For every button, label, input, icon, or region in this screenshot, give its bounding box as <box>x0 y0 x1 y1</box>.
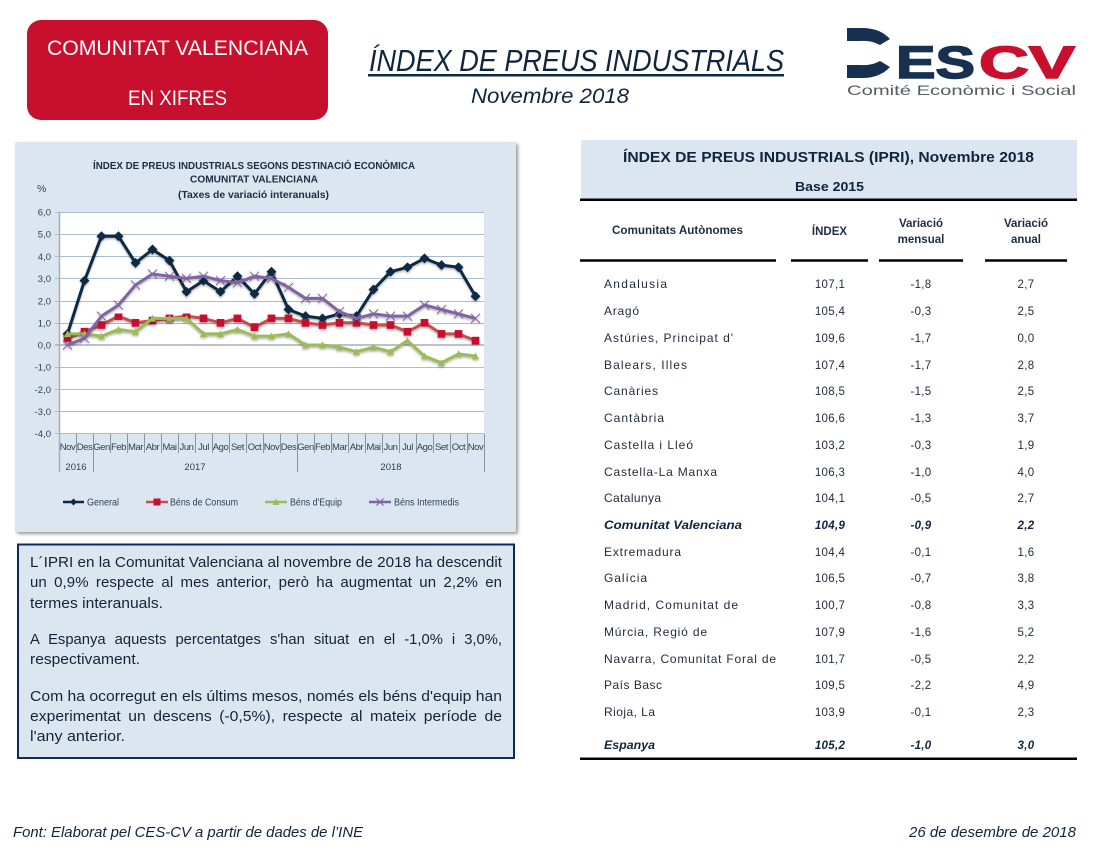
table rows: -0,9 <box>910 520 932 532</box>
text panel: commentary: un 0,9% respecte al mes anterior, però ha augmentat un 2,2% en <box>30 574 502 591</box>
table rows: 3,0 <box>1018 740 1035 752</box>
legend: Béns de Consum <box>170 498 238 508</box>
legend: Béns Intermedis <box>394 498 459 508</box>
table rows: -1,3 <box>910 413 932 425</box>
table rows: 3,7 <box>1018 413 1034 425</box>
chart title: ÍNDEX DE PREUS INDUSTRIALS SEGONS DESTINACIÓ ECONÒMICA <box>93 159 415 172</box>
table rows <box>580 277 1077 760</box>
x-axis year labels: 2016 <box>65 462 87 473</box>
x-axis month labels: Oct <box>452 442 466 453</box>
x-axis month labels: Mar <box>332 442 347 453</box>
series: Béns de Consum <box>68 316 476 341</box>
table rows: -1,0 <box>910 740 932 752</box>
table rows: -2,2 <box>910 680 932 692</box>
table rows: 107,9 <box>815 627 845 639</box>
x-axis month labels: Ago <box>213 442 228 453</box>
table heading band: Base 2015 <box>795 179 864 194</box>
logo: CES-CV <box>847 28 1076 98</box>
text panel: commentary: L´IPRI en la Comunitat Valenciana al novembre de 2018 ha descendit <box>30 554 503 571</box>
table rows: País Basc <box>604 678 662 692</box>
panel: line chart <box>15 142 516 532</box>
table rows: Andalusia <box>604 277 667 291</box>
legend: Béns d'Equip <box>290 498 342 508</box>
table rows: 2,7 <box>1018 493 1034 505</box>
table rows: Espanya <box>604 738 655 752</box>
table rows: -1,8 <box>910 279 932 291</box>
table rows: 3,8 <box>1018 573 1034 585</box>
table rows: Rioja, La <box>604 705 655 719</box>
x-axis month labels: Set <box>231 442 245 453</box>
y-axis labels: -2,0 <box>35 385 51 396</box>
x-axis month labels: Feb <box>111 442 126 453</box>
table rows: Aragó <box>604 304 639 318</box>
table rows: 106,5 <box>815 573 845 585</box>
text panel: commentary: experimentat un descens (-0,5%), respecte al mateix període de <box>30 708 502 725</box>
table rows: 106,6 <box>815 413 845 425</box>
table rows: 2,3 <box>1018 707 1034 719</box>
logo: CES-CV: ES <box>896 37 975 88</box>
table rows: -0,8 <box>910 600 932 612</box>
table rows: -0,1 <box>910 707 932 719</box>
x-axis month labels: Jul <box>198 442 209 453</box>
table rows: 2,5 <box>1018 386 1034 398</box>
y-axis labels: 5,0 <box>38 230 51 241</box>
x-axis year labels: 2017 <box>184 462 206 473</box>
table rows: -0,5 <box>910 654 932 666</box>
table rows: 104,1 <box>815 493 845 505</box>
text panel: commentary: termes interanuals. <box>30 595 163 612</box>
legend: General <box>87 498 119 508</box>
table rows: Madrid, Comunitat de <box>604 598 738 612</box>
table rows: 2,2 <box>1017 520 1035 532</box>
table column headers: Variació <box>899 218 943 230</box>
y-axis labels: 4,0 <box>38 252 51 263</box>
legend <box>63 498 459 508</box>
x-axis month labels <box>60 442 484 453</box>
table rows: 0,0 <box>1018 333 1034 345</box>
chart title <box>93 159 415 201</box>
table rows: 1,9 <box>1018 440 1034 452</box>
x-axis month labels: Gen <box>93 442 110 453</box>
x-axis month labels: Feb <box>315 442 330 453</box>
x-axis month labels: Mar <box>128 442 143 453</box>
table rows: Múrcia, Regió de <box>604 625 707 639</box>
y-axis labels: -1,0 <box>35 363 51 374</box>
table rows: -0,5 <box>910 493 932 505</box>
y-axis unit: % <box>37 183 46 195</box>
text panel: commentary <box>18 544 514 758</box>
table rows: 2,5 <box>1018 306 1034 318</box>
text panel: commentary: respectivament. <box>30 651 140 668</box>
table rows: 5,2 <box>1018 627 1034 639</box>
table column headers <box>580 218 1067 260</box>
table rows: 103,2 <box>815 440 845 452</box>
chart title: COMUNITAT VALENCIANA <box>190 174 318 186</box>
table rows: Catalunya <box>604 491 661 505</box>
table rows: 104,4 <box>815 547 845 559</box>
badge: Comunitat Valenciana en xifres: COMUNITAT VALENCIANA <box>47 37 308 60</box>
table column headers: mensual <box>898 234 944 246</box>
x-axis month labels: Jun <box>180 442 194 453</box>
table rows: -1,7 <box>910 360 932 372</box>
text panel: commentary: Com ha ocorregut en els últims mesos, només els béns d'equip han <box>30 688 502 705</box>
x-axis month labels: Nov <box>60 442 76 453</box>
series: Béns Intermedis <box>68 274 476 345</box>
table rows: Astúries, Principat d' <box>604 331 733 345</box>
table rows: -1,7 <box>910 333 932 345</box>
x-axis month labels: Nov <box>264 442 280 453</box>
x-axis month labels: Oct <box>248 442 262 453</box>
footer date: 26 de desembre de 2018 <box>908 825 1076 841</box>
table rows: Comunitat Valenciana <box>604 518 742 532</box>
chart title: (Taxes de variació interanuals) <box>178 189 329 201</box>
series: Béns d'Equip <box>68 318 476 363</box>
x-axis month labels: Des <box>281 442 297 453</box>
table rows: 108,5 <box>815 386 845 398</box>
table column headers: Comunitats Autònomes <box>612 225 743 237</box>
table rows: 3,3 <box>1018 600 1034 612</box>
x-axis ticks <box>76 434 484 472</box>
table rows: 4,0 <box>1018 467 1034 479</box>
table rows: -1,0 <box>910 467 932 479</box>
table rows: 105,2 <box>815 740 845 752</box>
x-axis month labels: Abr <box>350 442 364 453</box>
title: ÍNDEX DE PREUS INDUSTRIALS <box>369 43 784 78</box>
table rows: Castella-La Manxa <box>604 465 717 479</box>
plot area <box>59 212 484 434</box>
table rows: 107,1 <box>815 279 845 291</box>
table rows: Cantàbria <box>604 411 664 425</box>
x-axis month labels: Jun <box>384 442 398 453</box>
table rows: Navarra, Comunitat Foral de <box>604 652 776 666</box>
table rows: 2,2 <box>1018 654 1034 666</box>
footer source: Font: Elaborat pel CES-CV a partir de dades de l’INE <box>13 825 363 841</box>
y-axis labels: 2,0 <box>38 296 51 307</box>
y-axis labels: -4,0 <box>35 429 51 440</box>
y-axis labels: 3,0 <box>38 274 51 285</box>
x-axis month labels: Jul <box>402 442 413 453</box>
table heading band: ÍNDEX DE PREUS INDUSTRIALS (IPRI), Novembre 2018 <box>623 149 1034 166</box>
x-axis month labels: Abr <box>146 442 160 453</box>
badge: Comunitat Valenciana en xifres <box>27 20 328 120</box>
table rows: Canàries <box>604 384 658 398</box>
table rows: 1,6 <box>1018 547 1034 559</box>
table rows: 109,5 <box>815 680 845 692</box>
x-axis month labels: Nov <box>468 442 484 453</box>
table rows: -0,3 <box>910 440 932 452</box>
table rows: 101,7 <box>815 654 845 666</box>
x-axis year labels <box>65 462 402 473</box>
table rows: 105,4 <box>815 306 845 318</box>
table rows: 107,4 <box>815 360 845 372</box>
table rows: 103,9 <box>815 707 845 719</box>
table column headers: anual <box>1011 234 1041 246</box>
x-axis month labels: Mai <box>367 442 381 453</box>
table rows: 104,9 <box>815 520 845 532</box>
badge: Comunitat Valenciana en xifres: EN XIFRES <box>128 87 227 110</box>
table rows: 2,8 <box>1018 360 1034 372</box>
table rows: Galícia <box>604 571 647 585</box>
table rows: 4,9 <box>1018 680 1034 692</box>
table column headers: ÍNDEX <box>812 225 847 238</box>
x-axis month labels: Set <box>435 442 449 453</box>
table rows: 106,3 <box>815 467 845 479</box>
table rows: -1,5 <box>910 386 932 398</box>
table rows: Extremadura <box>604 545 681 559</box>
table rows: Balears, Illes <box>604 358 687 372</box>
subtitle: Novembre 2018 <box>471 85 629 108</box>
text panel: commentary: l'any anterior. <box>30 728 125 745</box>
logo: CES-CV: Comité Econòmic i Social <box>847 82 1076 98</box>
table rows: -1,6 <box>910 627 932 639</box>
table rows: Castella i Lleó <box>604 438 693 452</box>
series: General <box>68 236 476 334</box>
table heading band <box>580 140 1077 201</box>
y-axis labels: -3,0 <box>35 407 51 418</box>
y-axis labels: 1,0 <box>38 318 51 330</box>
x-axis month labels: Des <box>77 442 93 453</box>
table rows: 2,7 <box>1018 279 1034 291</box>
logo: CES-CV: CV <box>979 37 1075 88</box>
table rows: -0,1 <box>910 547 932 559</box>
y-axis labels: 6,0 <box>38 208 51 218</box>
table rows: -0,7 <box>910 573 932 585</box>
table column headers: Variació <box>1004 218 1048 230</box>
table rows: -0,3 <box>910 306 932 318</box>
x-axis year labels: 2018 <box>380 462 402 473</box>
y-axis labels <box>35 208 51 440</box>
y-axis labels: 0,0 <box>38 340 51 352</box>
table rows: 100,7 <box>815 600 845 612</box>
text panel: commentary: A Espanya aquests percentatges s'han situat en el -1,0% i 3,0%, <box>30 631 502 648</box>
x-axis month labels: Mai <box>163 442 177 453</box>
x-axis month labels: Gen <box>297 442 314 453</box>
table rows: 109,6 <box>815 333 845 345</box>
x-axis month labels: Ago <box>417 442 432 453</box>
